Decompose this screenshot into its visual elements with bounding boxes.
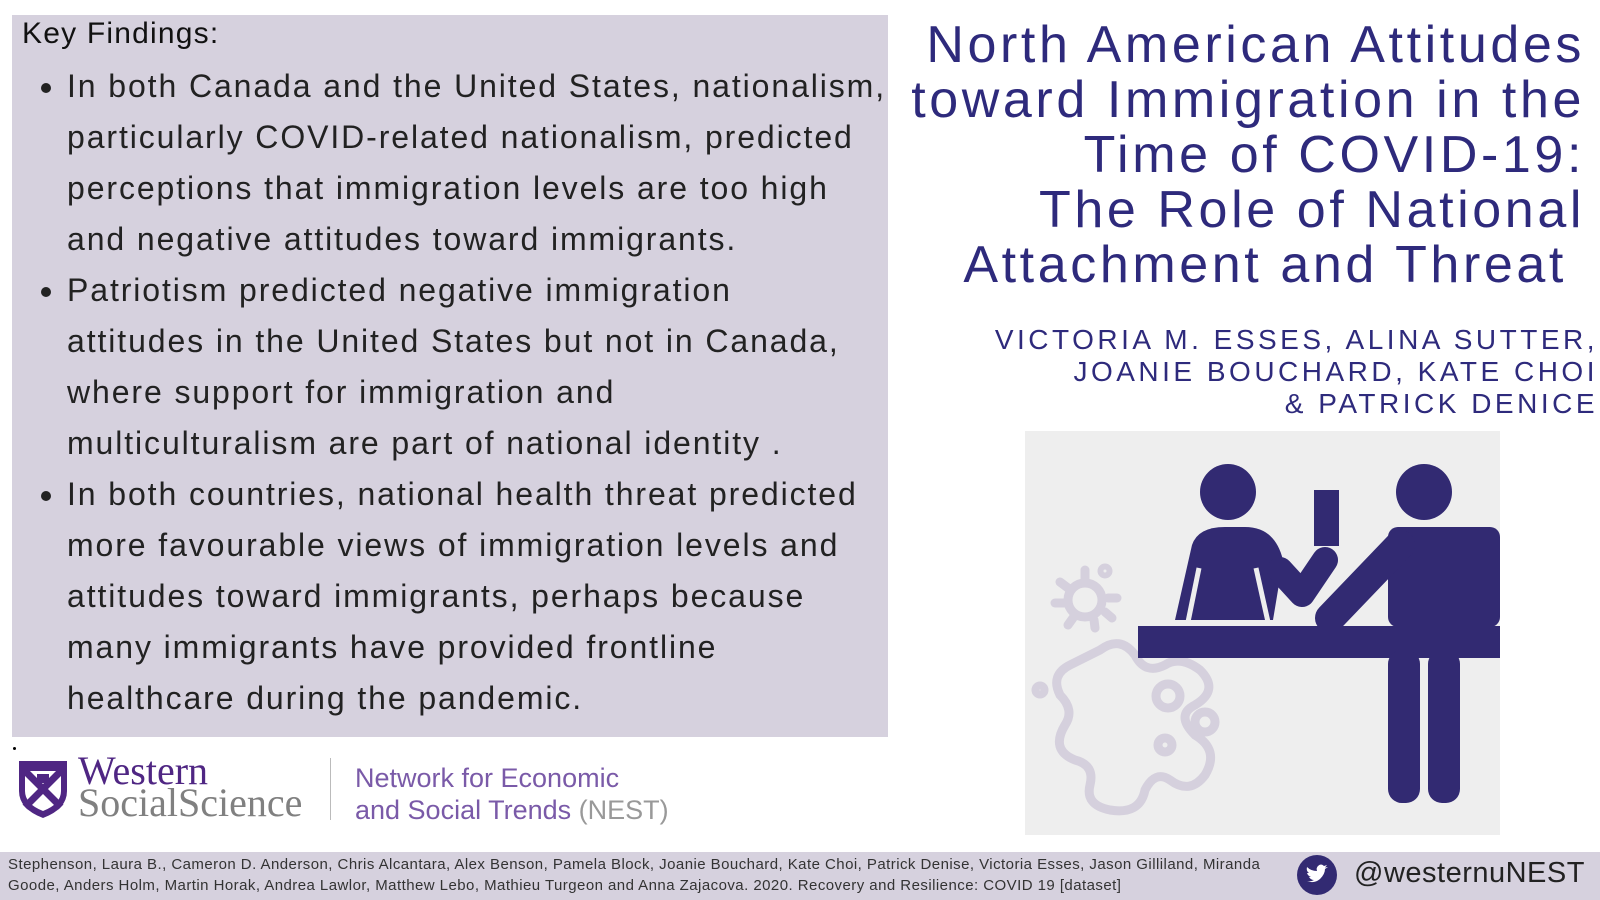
bullet list: [41, 68, 886, 716]
authors: JOANIE BOUCHARD, KATE CHOI: [1073, 356, 1598, 387]
title: North American Attitudes: [926, 16, 1585, 74]
heading: key findings: Key Findings:: [22, 17, 219, 50]
title: Attachment and Threat: [963, 236, 1567, 294]
bullet list: perceptions that immigration levels are too high: [67, 170, 829, 206]
logo: western social science: [19, 748, 669, 825]
authors: & PATRICK DENICE: [1285, 388, 1598, 419]
logo text: SocialScience: [78, 780, 302, 825]
bullet list: and negative attitudes toward immigrants.: [67, 221, 737, 257]
panel: key findings: [12, 15, 888, 737]
citation: [8, 856, 1260, 894]
stray bullet dot: [13, 747, 16, 750]
footer bar: [0, 852, 1600, 900]
bullet list: In both Canada and the United States, nationalism,: [67, 68, 886, 104]
illustration: immigration counter with virus: [1025, 431, 1500, 835]
bullet list: where support for immigration and: [67, 374, 615, 410]
citation: Stephenson, Laura B., Cameron D. Anderson, Chris Alcantara, Alex Benson, Pamela Block, Joanie Bouchard, Kate Choi, Patrick Denise, Victoria Esses, Jason Gilliland, Miranda: [8, 856, 1260, 873]
citation: Goode, Anders Holm, Martin Horak, Andrea Lawlor, Matthew Lebo, Mathieu Turgeon and Anna Zajacova. 2020. Recovery and Resilience: COVID 19 [dataset]: [8, 876, 1121, 894]
bullet list: In both countries, national health threat predicted: [67, 476, 858, 512]
icon: people at counter: [1138, 464, 1500, 803]
authors: [995, 324, 1598, 419]
title: The Role of National: [1039, 181, 1585, 239]
bullet list: healthcare during the pandemic.: [67, 680, 583, 716]
bullet list: attitudes toward immigrants, perhaps because: [67, 578, 805, 614]
authors: VICTORIA M. ESSES, ALINA SUTTER,: [995, 324, 1598, 355]
bullet list: attitudes in the United States but not in Canada,: [67, 323, 840, 359]
twitter handle: @westernuNEST: [1354, 857, 1585, 889]
logo text: Western: [78, 748, 208, 793]
bullet list: particularly COVID-related nationalism, predicted: [67, 119, 854, 155]
icon: twitter: [1297, 855, 1337, 895]
icon: shield: [19, 761, 67, 818]
title: Time of COVID-19:: [1084, 126, 1585, 184]
bullet list: many immigrants have provided frontline: [67, 629, 717, 665]
logo: western social science: and Social Trends (NEST): [355, 795, 669, 825]
logo text: [78, 748, 302, 825]
bullet list: multiculturalism are part of national identity .: [67, 425, 782, 461]
bullet list: Patriotism predicted negative immigration: [67, 272, 732, 308]
title: toward Immigration in the: [911, 71, 1585, 129]
bullet list: more favourable views of immigration levels and: [67, 527, 839, 563]
icon: virus: [1036, 568, 1215, 811]
logo: western social science: Network for Economic: [355, 763, 619, 793]
title: [911, 16, 1585, 294]
